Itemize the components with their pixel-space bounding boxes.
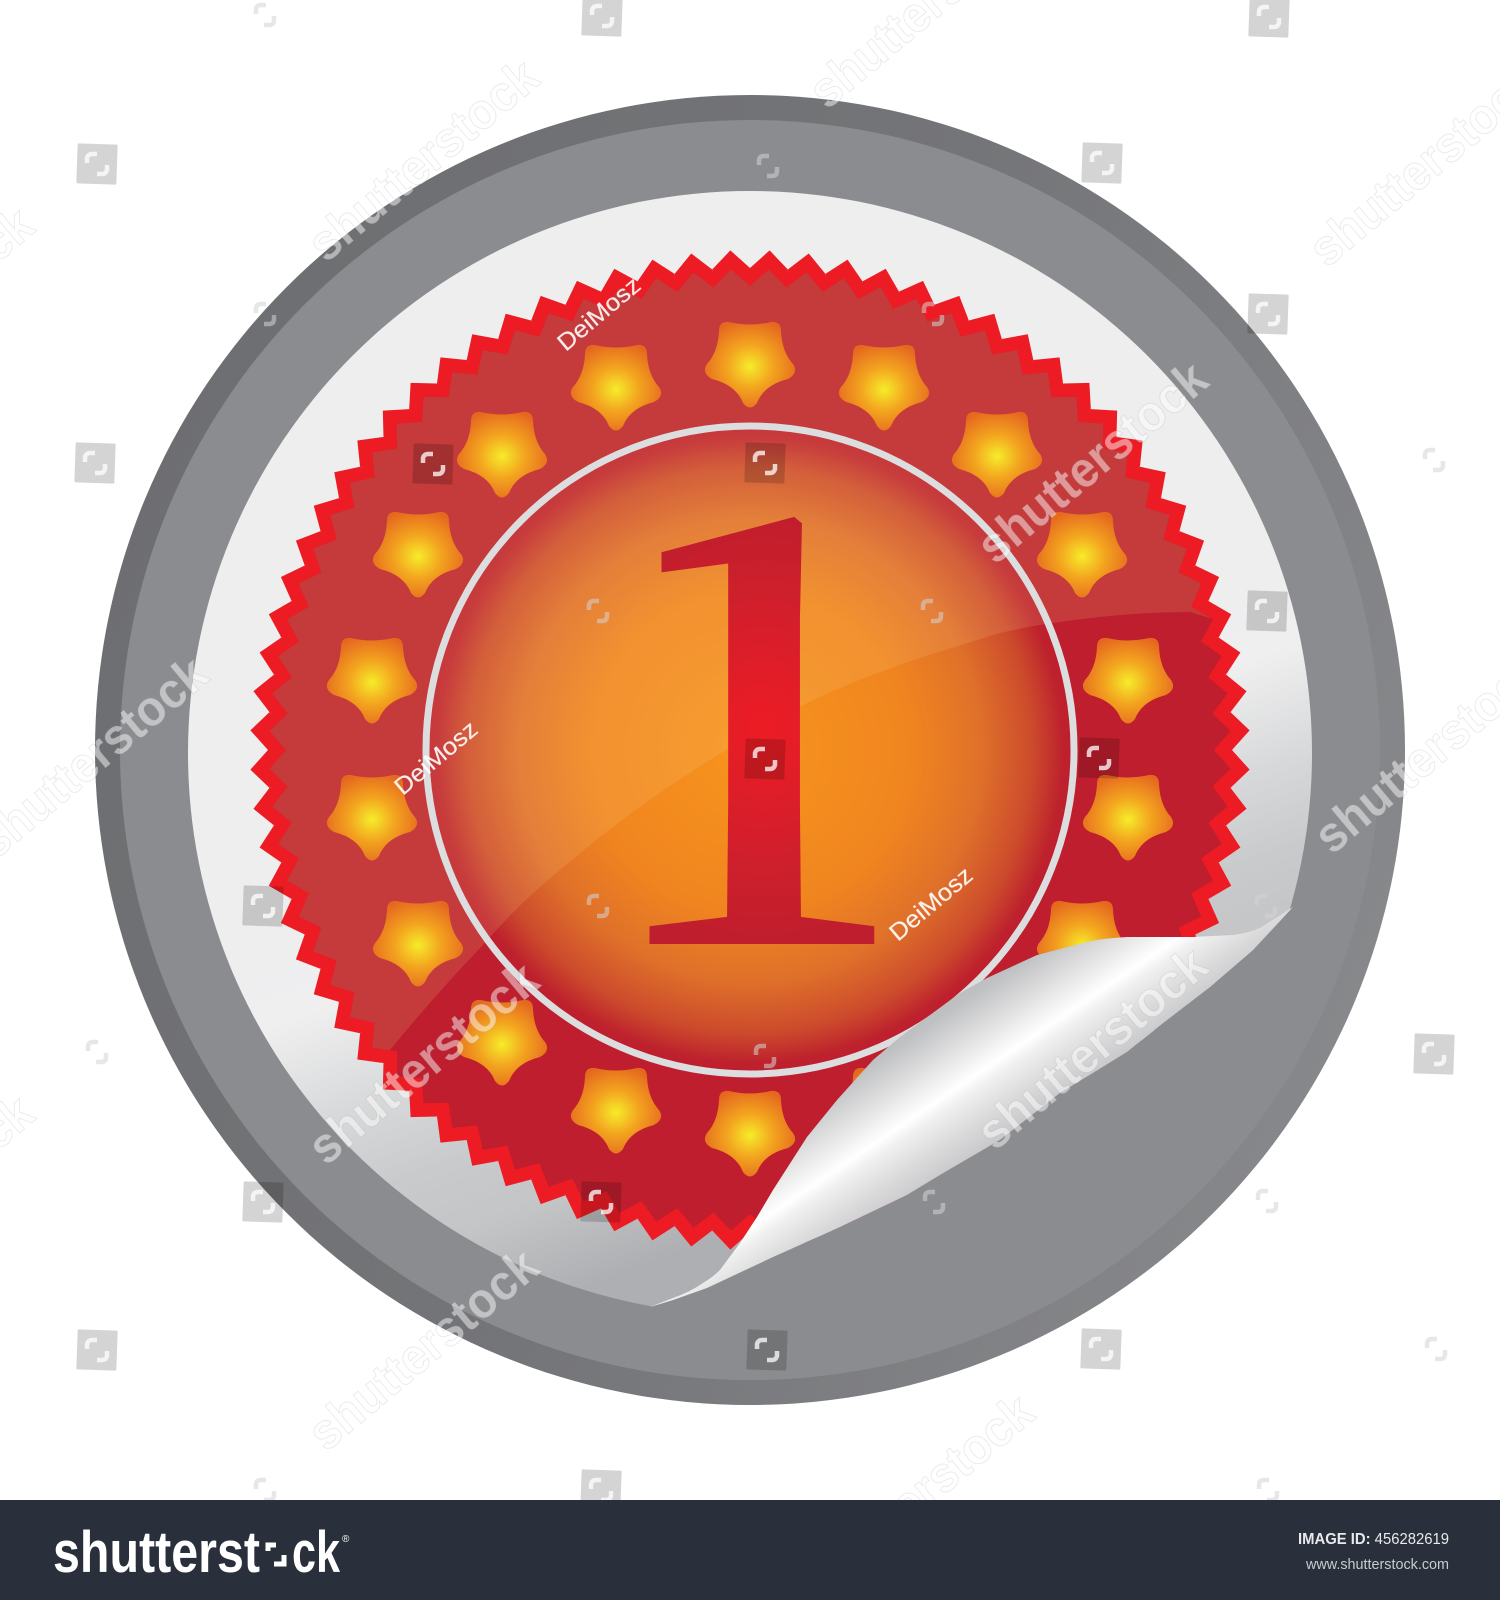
- contributor watermarks: DeiMosz: [389, 716, 483, 801]
- disc gloss: [430, 430, 1044, 937]
- footer bar: [0, 1500, 1500, 1600]
- contributor watermarks: DeiMosz: [884, 862, 978, 947]
- shutterstock watermarks: shutterstock: [297, 48, 549, 272]
- shutterstock watermarks: shutterstock: [297, 1237, 549, 1461]
- central orange disc: [428, 428, 1072, 1072]
- sticker face: [188, 191, 1312, 1315]
- shutterstock watermarks: shutterstock: [792, 1383, 1044, 1600]
- contributor watermarks: DeiMosz: [552, 272, 646, 357]
- revealed grey backing under peel: [652, 911, 1290, 1315]
- footer logo: shutterst: [53, 1520, 260, 1585]
- shutterstock watermarks: shutterstock: [297, 951, 549, 1175]
- footer logo: ®: [342, 1534, 350, 1545]
- peeled corner: [650, 907, 1293, 1307]
- serrated red edge: [129, 129, 1371, 1371]
- inner seal fill: [153, 153, 1347, 1347]
- numeral 1: 1: [605, 265, 914, 1113]
- outer grey ring: [95, 95, 1405, 1405]
- ring of stars: [327, 322, 1173, 1177]
- seal badge: [250, 250, 1250, 1250]
- footer logo: ck: [292, 1520, 341, 1585]
- gloss over seal: [270, 270, 1211, 1050]
- shutterstock watermarks: shutterstock: [966, 936, 1218, 1160]
- image id: IMAGE ID: 456282619: [1298, 1531, 1449, 1548]
- contributor watermarks: [389, 272, 978, 947]
- shutterstock watermarks: shutterstock: [966, 350, 1218, 574]
- site url: www.shutterstock.com: [1305, 1556, 1449, 1573]
- disc ring: [426, 426, 1074, 1074]
